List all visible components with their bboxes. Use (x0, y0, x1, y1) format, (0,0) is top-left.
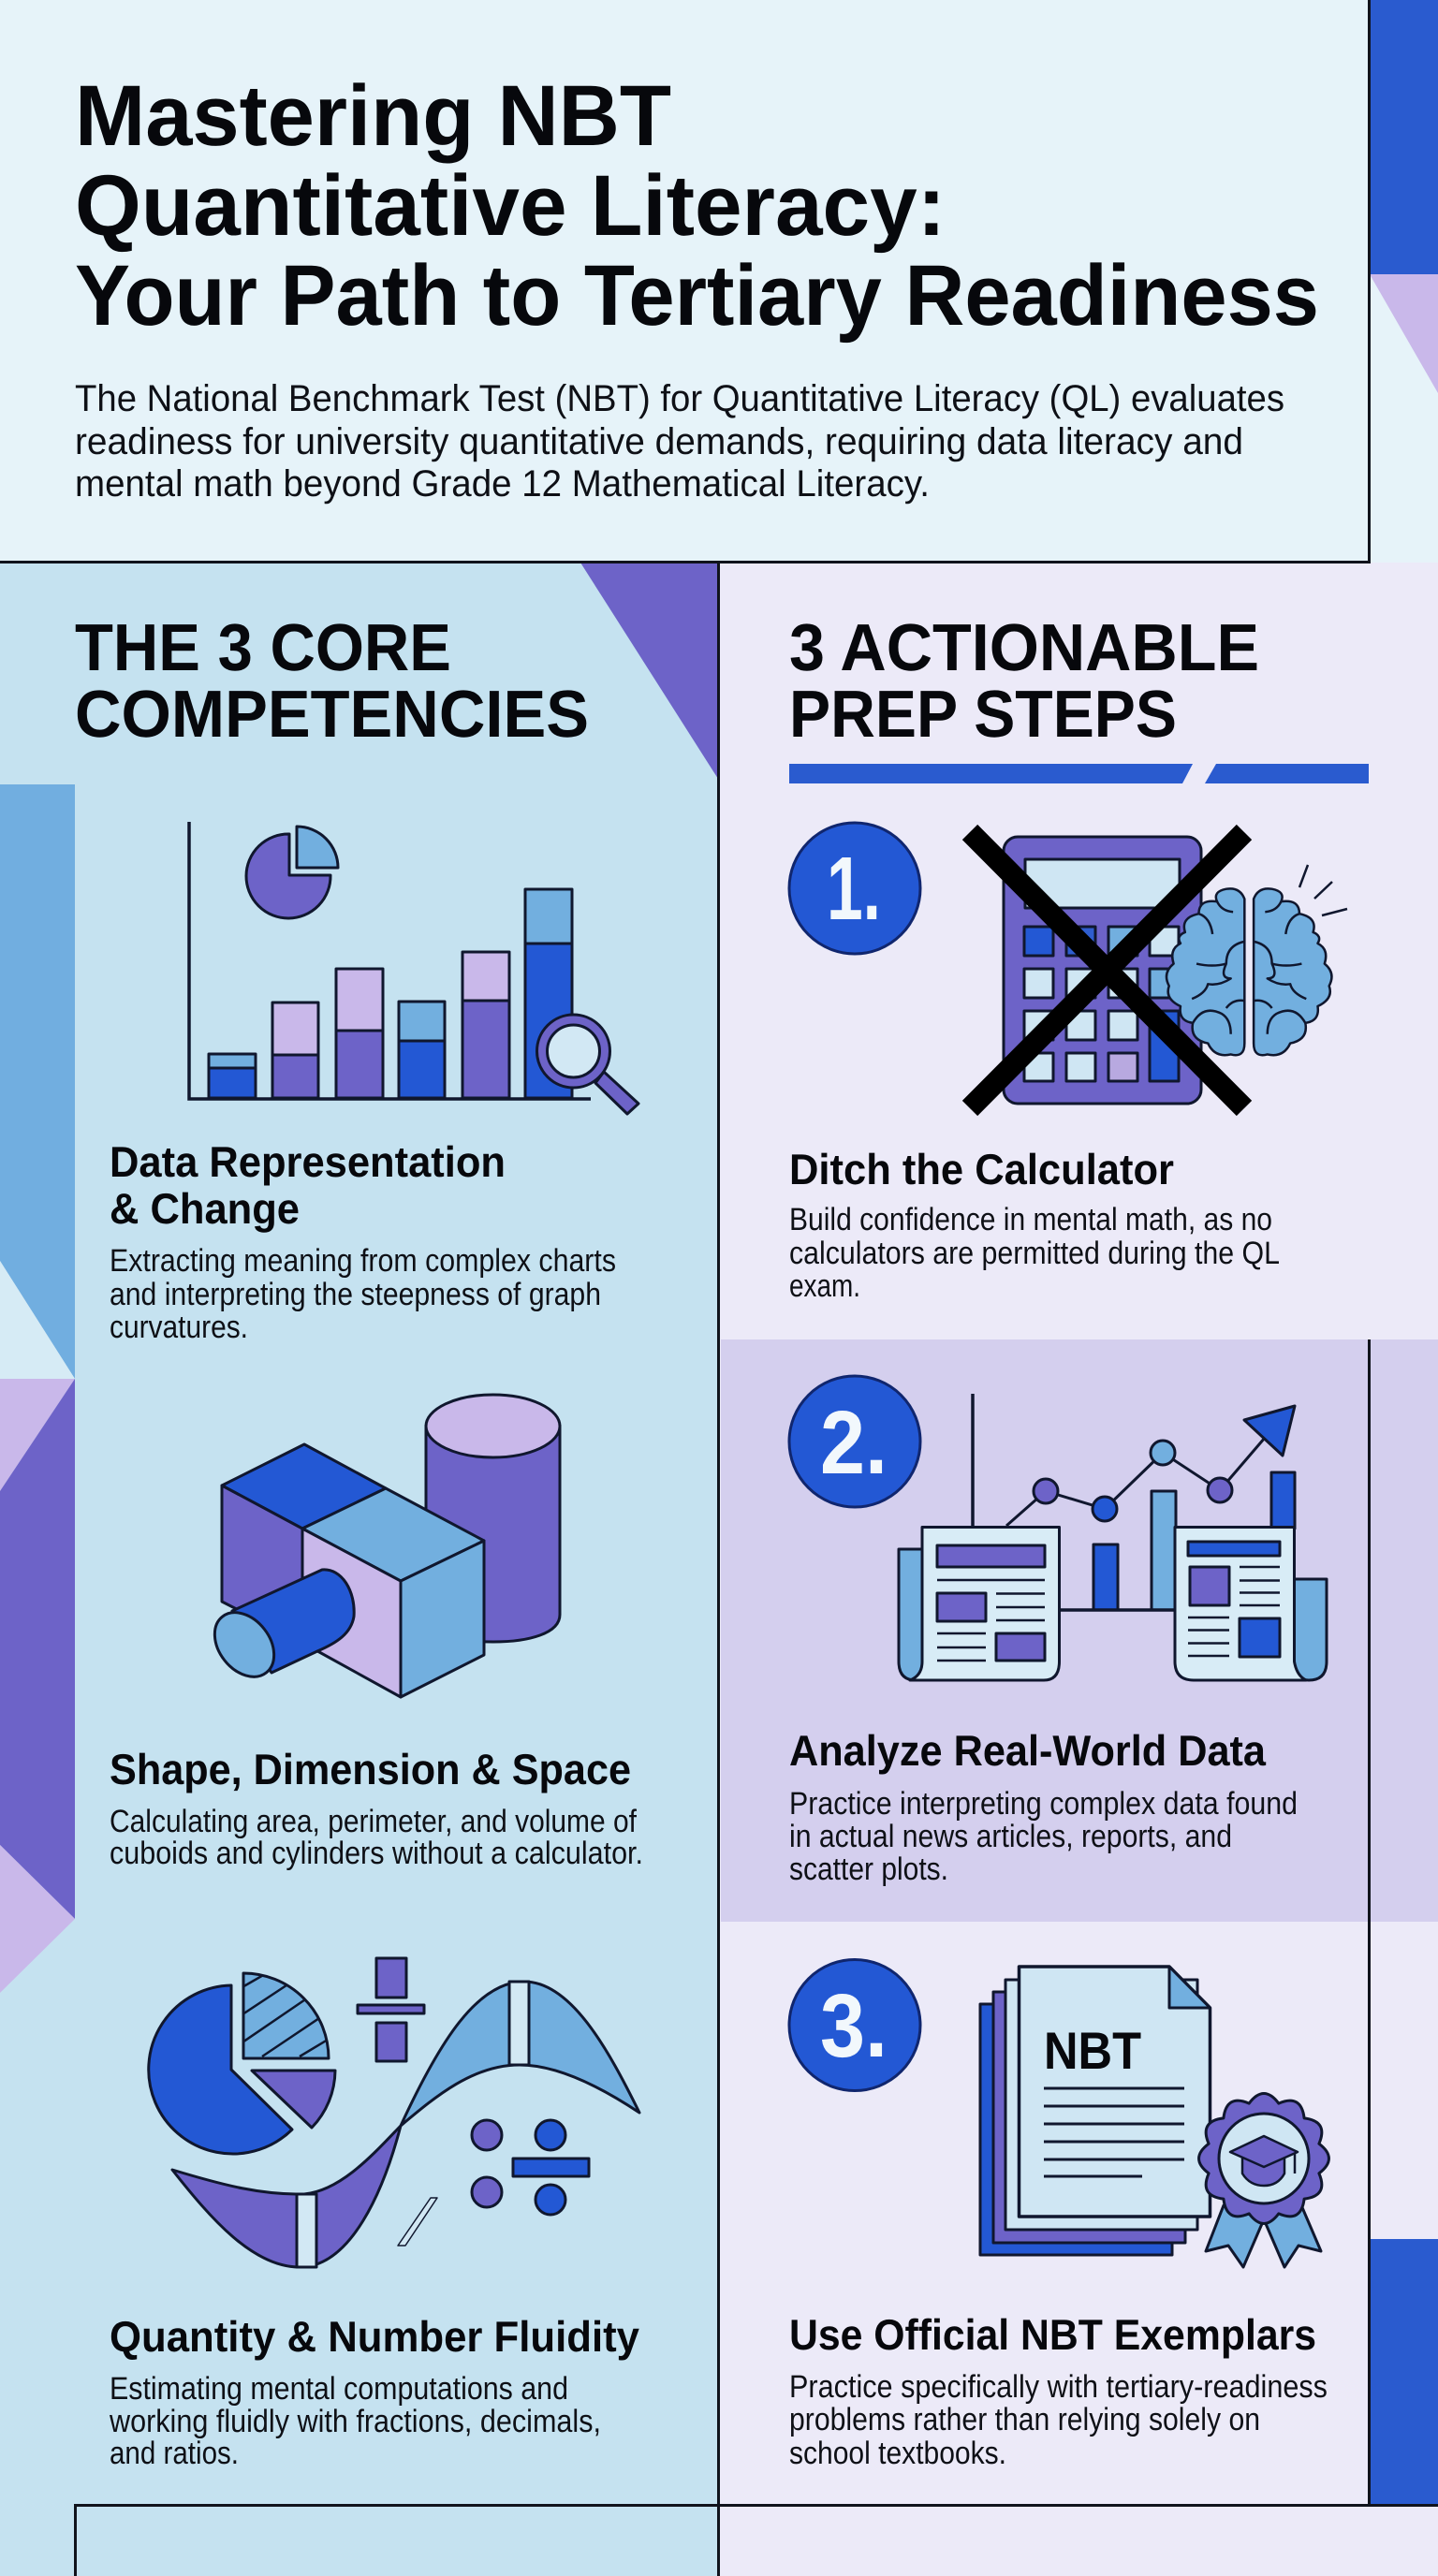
title: Your Path to Tertiary Readiness (75, 248, 1319, 344)
text: data representation and change: curvatures. (110, 1310, 248, 1345)
icon: newspapers with rising line chart (899, 1394, 1327, 1680)
text: data representation and change: and interpreting the steepness of graph (110, 1277, 601, 1312)
text: data representation and change: Data Representation (110, 1137, 506, 1186)
panel: right column background (719, 562, 1438, 2576)
text: ditch the calculator: Ditch the Calculator (789, 1145, 1174, 1193)
text: quantity and number fluidity: and ratios. (110, 2436, 239, 2471)
intro text: The National Benchmark Test (NBT) for Quantitative Literacy (QL) evaluates (75, 378, 1284, 419)
text: use official NBT exemplars: Practice specifically with tertiary-readiness (789, 2369, 1328, 2405)
text: quantity and number fluidity: working fluidly with fractions, decimals, (109, 2404, 601, 2439)
icon: crossed out calculator and brain (970, 832, 1347, 1108)
text: quantity and number fluidity (109, 2312, 639, 2471)
heading: 3 actionable prep steps: 3 ACTIONABLE (789, 611, 1259, 685)
badge: number 2 (789, 1376, 920, 1507)
icon: 3D solids (202, 1395, 560, 1697)
badge: number 2: 2. (820, 1393, 888, 1493)
icon: fractions, pie and wave (149, 1958, 639, 2267)
badge: number 1: 1. (827, 839, 881, 939)
text: quantity and number fluidity: Estimating mental computations and (110, 2371, 568, 2407)
text: data representation and change: Extracting meaning from complex charts (110, 1243, 616, 1279)
title: Mastering NBT (75, 68, 671, 164)
heading: the 3 core competencies (75, 611, 589, 752)
heading: 3 actionable prep steps (789, 611, 1259, 752)
heading: the 3 core competencies: THE 3 CORE (75, 611, 451, 685)
badge: number 3 (789, 1960, 920, 2091)
text: data representation and change: & Change (110, 1184, 300, 1233)
text: analyze real-world data: Analyze Real-World Data (789, 1726, 1266, 1775)
badge: number 1 (789, 823, 920, 954)
text: shape, dimension and space (110, 1745, 643, 1871)
decorative: purple corner triangle (580, 563, 718, 779)
text: ditch the calculator: Build confidence in mental math, as no (789, 1202, 1272, 1237)
text: shape, dimension and space: Shape, Dimension & Space (110, 1745, 631, 1793)
text: use official NBT exemplars: problems rather than relying solely on (789, 2402, 1260, 2437)
text: use official NBT exemplars: Use Official NBT Exemplars (789, 2310, 1316, 2359)
heading: the 3 core competencies: COMPETENCIES (75, 678, 589, 752)
text: analyze real-world data: Practice interpreting complex data found (789, 1786, 1298, 1822)
icon: NBT document stack with award ribbon (980, 1967, 1328, 2267)
intro text: readiness for university quantitative demands, requiring data literacy and (75, 421, 1243, 462)
text: data representation and change (110, 1137, 616, 1345)
text: analyze real-world data (789, 1726, 1298, 1887)
text: analyze real-world data: scatter plots. (789, 1852, 948, 1887)
text: shape, dimension and space: cuboids and cylinders without a calculator. (110, 1836, 643, 1871)
text: shape, dimension and space: Calculating area, perimeter, and volume of (110, 1804, 637, 1839)
icon: bar chart with pie and magnifier (189, 822, 638, 1114)
text: analyze real-world data: in actual news articles, reports, and (789, 1819, 1232, 1854)
intro text: mental math beyond Grade 12 Mathematical Literacy. (75, 463, 930, 505)
text: ditch the calculator: exam. (789, 1268, 860, 1304)
decorative: header right accent (1370, 0, 1438, 393)
text: ditch the calculator (789, 1145, 1280, 1304)
decorative: left column accent shapes (0, 784, 75, 1993)
badge: number 3: 3. (820, 1976, 888, 2076)
text: use official NBT exemplars: school textbooks. (789, 2436, 1006, 2471)
decorative: lower right blue block (1370, 2239, 1438, 2505)
heading: 3 actionable prep steps: PREP STEPS (789, 678, 1177, 752)
title: Quantitative Literacy: (75, 158, 946, 254)
icon: NBT document stack with award ribbon: NBT (1044, 2021, 1141, 2080)
title (75, 68, 1319, 344)
panel: left column background (0, 562, 719, 2576)
text: ditch the calculator: calculators are permitted during the QL (789, 1236, 1280, 1271)
panel: step 2 highlighted band (721, 1339, 1438, 1922)
panel: header background (0, 0, 1438, 563)
text: quantity and number fluidity: Quantity & Number Fluidity (110, 2312, 639, 2361)
heading underline bar (789, 764, 1369, 783)
text: use official NBT exemplars (789, 2310, 1328, 2471)
intro text (75, 378, 1284, 505)
